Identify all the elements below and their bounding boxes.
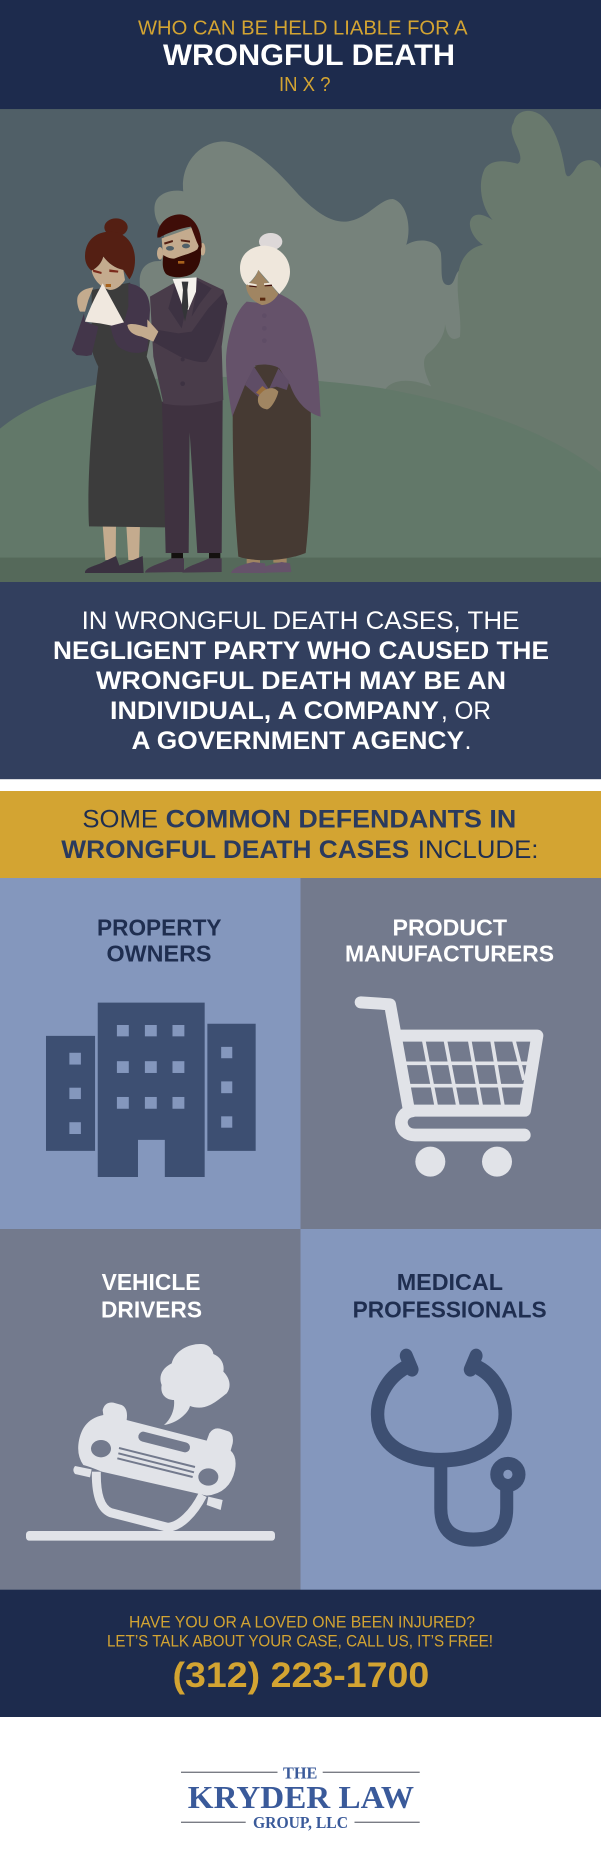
statement panel — [0, 582, 601, 779]
statement line 4: INDIVIDUAL, A COMPANY — [110, 697, 439, 725]
statement line 4: , OR — [441, 697, 491, 725]
card title: OWNERS — [106, 940, 212, 966]
illustration: mourning family in a landscape — [0, 109, 601, 583]
figure: woman with handkerchief — [72, 218, 165, 573]
card title: PROPERTY — [97, 914, 222, 940]
logo: The Kryder Law Group: GROUP, LLC — [253, 1813, 348, 1832]
icon: office buildings — [46, 1003, 256, 1177]
logo: The Kryder Law Group: KRYDER LAW — [188, 1779, 414, 1815]
call to action panel — [0, 1590, 601, 1717]
card: property owners — [0, 878, 300, 1229]
heading line 1: COMMON DEFENDANTS IN — [166, 806, 516, 834]
card: vehicle drivers — [0, 1229, 300, 1590]
statement line 5: . — [464, 727, 471, 755]
title line 2: WRONGFUL DEATH — [163, 39, 455, 72]
logo: The Kryder Law Group — [181, 1764, 420, 1832]
heading line 2 — [61, 836, 539, 864]
figures group — [72, 214, 321, 573]
defendants heading band — [0, 791, 601, 878]
statement line 5: A GOVERNMENT AGENCY — [132, 727, 464, 755]
landscape background — [0, 109, 601, 583]
card title: PROFESSIONALS — [353, 1296, 547, 1322]
icon: shopping cart — [361, 1002, 537, 1177]
card: medical professionals — [300, 1229, 601, 1590]
call to action text: HAVE YOU OR A LOVED ONE BEEN INJURED? — [129, 1613, 475, 1631]
phone number: (312) 223-1700 — [172, 1656, 429, 1695]
card title: VEHICLE — [102, 1269, 200, 1295]
card title: PRODUCT — [392, 914, 508, 940]
call to action text — [107, 1613, 493, 1650]
statement line 2: NEGLIGENT PARTY WHO CAUSED THE — [53, 637, 549, 665]
card title — [353, 1269, 547, 1322]
card title — [345, 914, 554, 966]
card title: MEDICAL — [397, 1269, 503, 1295]
figure: elderly woman — [226, 233, 321, 573]
card title: DRIVERS — [101, 1296, 202, 1322]
card title: MANUFACTURERS — [345, 940, 554, 966]
icon: stethoscope — [378, 1356, 526, 1540]
title line 1: WHO CAN BE HELD LIABLE FOR A — [138, 18, 468, 40]
statement line 1: IN WRONGFUL DEATH CASES, THE — [82, 607, 519, 635]
call to action text: LET’S TALK ABOUT YOUR CASE, CALL US, IT’S FREE! — [107, 1632, 493, 1650]
card title — [97, 914, 222, 966]
header panel — [0, 0, 601, 110]
card title — [101, 1269, 202, 1322]
logo: The Kryder Law Group: THE — [283, 1764, 317, 1782]
icon: overturned car with smoke — [26, 1344, 275, 1541]
statement line 3: WRONGFUL DEATH MAY BE AN — [96, 667, 506, 695]
title line 3: IN X ? — [279, 74, 330, 96]
heading line 1: SOME — [82, 806, 158, 834]
heading line 2: WRONGFUL DEATH CASES — [61, 836, 409, 864]
card: product manufacturers — [300, 878, 601, 1229]
figure: bearded man in suit — [127, 214, 227, 573]
heading line 2: INCLUDE: — [418, 836, 538, 864]
